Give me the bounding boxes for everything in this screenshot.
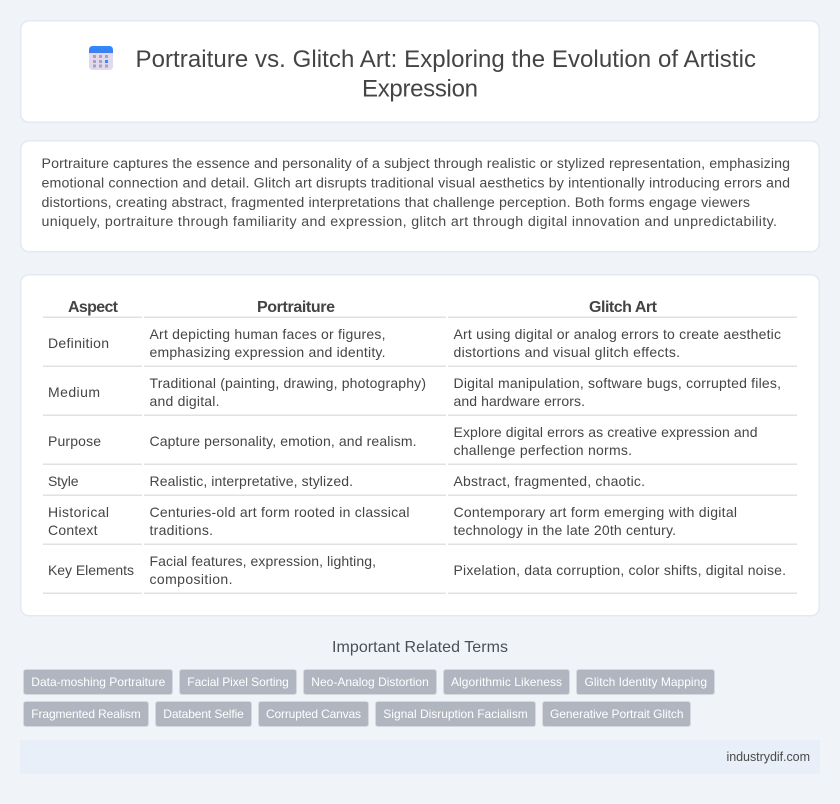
row: historical context (48, 504, 737, 538)
row: style: Abstract, fragmented, chaotic. (454, 473, 645, 489)
row: medium: Medium (48, 384, 100, 400)
row: style (48, 473, 645, 489)
row: definition: Definition (48, 335, 109, 351)
row: historical context: traditions. (150, 522, 213, 538)
row: key elements: Key Elements (48, 562, 134, 578)
tag: Databent Selfie (163, 707, 244, 721)
table header: Aspect (68, 299, 119, 316)
description text: uniquely, portraiture through familiarity and expression, glitch art through digital innovation and unpredictability. (42, 214, 777, 230)
tag: Algorithmic Likeness (451, 675, 562, 689)
footer (20, 740, 820, 774)
tag: Corrupted Canvas (266, 707, 361, 721)
tag: Signal Disruption Facialism (383, 707, 528, 721)
row: definition: distortions and visual glitch effects. (454, 344, 680, 360)
tag (24, 670, 172, 694)
row: historical context: Contemporary art form emerging with digital (454, 504, 737, 520)
row: medium: Traditional (painting, drawing, photography) (150, 375, 426, 391)
icon: calendar (89, 46, 113, 70)
tag (542, 702, 690, 726)
row: purpose: Explore digital errors as creative expression and (454, 424, 758, 440)
tag (180, 670, 296, 694)
tag: Fragmented Realism (31, 707, 141, 721)
row: purpose: Purpose (48, 433, 101, 449)
row: definition: Art using digital or analog errors to create aesthetic (454, 326, 781, 342)
panel: header (21, 21, 819, 122)
row: key elements: Facial features, expression, lighting, (150, 553, 376, 569)
tag (576, 670, 714, 694)
tag: Generative Portrait Glitch (550, 707, 684, 721)
title: Expression (362, 76, 478, 102)
row: purpose: challenge perfection norms. (454, 442, 632, 458)
row: purpose: Capture personality, emotion, and realism. (150, 433, 416, 449)
row: key elements (48, 553, 786, 587)
row: medium (48, 375, 781, 409)
tag: Facial Pixel Sorting (187, 675, 289, 689)
tag (376, 702, 536, 726)
tags (24, 670, 714, 726)
row: style: Realistic, interpretative, stylized. (150, 473, 353, 489)
panel: comparison table (21, 275, 819, 616)
row: definition: emphasizing expression and identity. (150, 344, 386, 360)
footer: industrydif.com (726, 750, 810, 764)
row: medium: and digital. (150, 393, 220, 409)
table header: Glitch Art (589, 299, 658, 316)
tag (24, 702, 148, 726)
description text: emotional connection and detail. Glitch art disrupts traditional visual aesthetics by intentionally introducing errors and (42, 176, 790, 192)
title (136, 46, 756, 102)
description text: Portraiture captures the essence and personality of a subject through realistic or stylized representation, emphasizing (42, 156, 790, 172)
tag (258, 702, 368, 726)
tag: Neo-Analog Distortion (311, 675, 429, 689)
row: historical context: technology in the late 20th century. (454, 522, 676, 538)
tag (444, 670, 570, 694)
table header (68, 299, 658, 316)
tag (304, 670, 436, 694)
tag: Data-moshing Portraiture (31, 675, 166, 689)
row: key elements: composition. (150, 571, 232, 587)
table header: Portraiture (257, 299, 335, 316)
row: definition: Art depicting human faces or figures, (150, 326, 386, 342)
row: historical context: Context (48, 522, 98, 538)
row: key elements: Pixelation, data corruption, color shifts, digital noise. (454, 562, 786, 578)
row: medium: Digital manipulation, software bugs, corrupted files, (454, 375, 781, 391)
description text (42, 156, 790, 230)
panel: description (21, 141, 819, 252)
row: historical context: Centuries-old art form rooted in classical (150, 504, 410, 520)
tag: Glitch Identity Mapping (584, 675, 707, 689)
row: definition (48, 326, 781, 360)
row: style: Style (48, 473, 79, 489)
description text: distortions, creating abstract, fragmented interpretations that challenge perception. Both forms engage viewers (42, 195, 750, 211)
tag (156, 702, 252, 726)
title: Portraiture vs. Glitch Art: Exploring the Evolution of Artistic (136, 46, 756, 73)
row: purpose (48, 424, 758, 458)
row: historical context: Historical (48, 504, 109, 520)
heading: important related terms: Important Related Terms (332, 639, 508, 656)
row: medium: and hardware errors. (454, 393, 585, 409)
